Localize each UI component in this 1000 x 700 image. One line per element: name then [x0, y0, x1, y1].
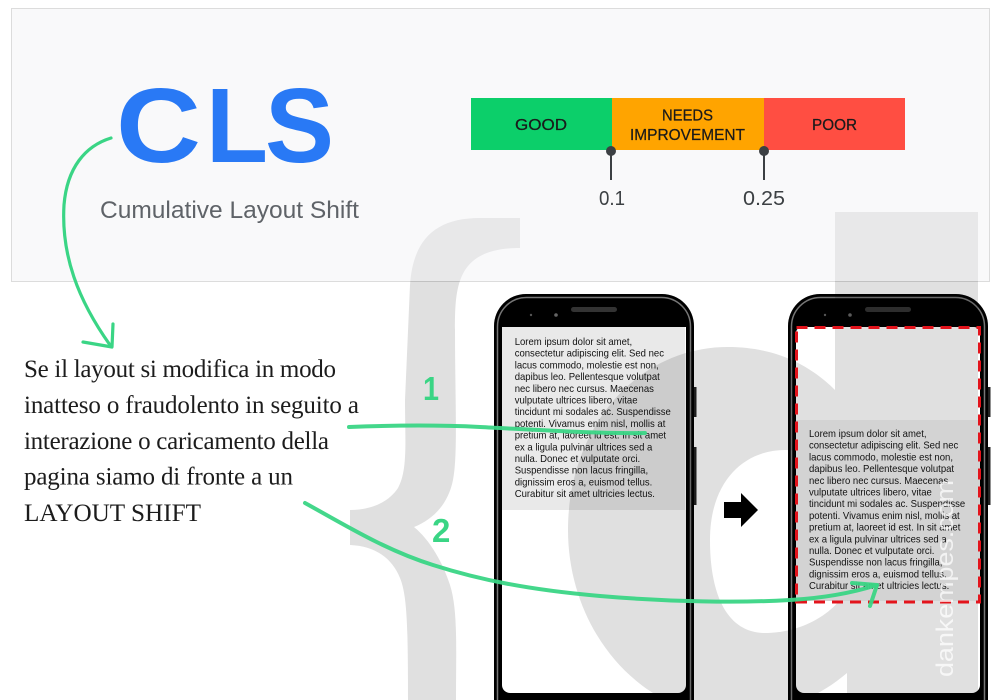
- phone 1 text: nulla. Donec et vulputate orci.: [515, 454, 640, 465]
- phone 2 text: nec libero nec cursus. Maecenas: [809, 476, 948, 487]
- watermark: brace and d logo: [350, 212, 978, 700]
- phone 2 text: nulla. Donec et vulputate orci.: [809, 546, 934, 557]
- label: needs improvement: IMPROVEMENT: [630, 127, 745, 144]
- marker 0.25: 0.25: [743, 188, 785, 210]
- phone 2 text: dignissim eros a, euismod tellus.: [809, 569, 947, 580]
- title: CLS: L: [206, 67, 268, 185]
- threshold bar: [471, 98, 905, 210]
- phone 1: before layout shift: [494, 294, 696, 700]
- phone 2 shifted content panel: [796, 420, 980, 601]
- phone 1 text: consectetur adipiscing elit. Sed nec: [515, 348, 664, 360]
- subtitle: Cumulative Layout Shift: [100, 197, 359, 224]
- phone 2 text: potenti. Vivamus enim nisl, mollis at: [809, 511, 960, 522]
- phone 1 text: lacus commodo, molestie est non,: [515, 360, 659, 371]
- header panel wash: [12, 9, 989, 281]
- title: CLS: [116, 67, 334, 185]
- phone 1 text: nec libero nec cursus. Maecenas: [515, 384, 654, 395]
- label: needs improvement: NEEDS: [662, 108, 713, 124]
- phone 2 text: Lorem ipsum dolor sit amet,: [809, 429, 927, 440]
- poor segment: [764, 98, 905, 150]
- body text: interazione o caricamento della: [24, 428, 329, 455]
- title: CLS: S: [265, 67, 334, 185]
- phone 1 text: Curabitur sit amet ultricies lectus.: [515, 489, 655, 500]
- phone 2 text: dapibus leo. Pellentesque volutpat: [809, 464, 954, 475]
- number 1: 1: [423, 370, 439, 407]
- phone 1 text: tincidunt mi sodales ac. Suspendisse: [515, 407, 671, 418]
- arrow between phones: [724, 493, 758, 527]
- phone 2 text: ex a ligula pulvinar ultrices sed a: [809, 534, 947, 545]
- body text: [24, 356, 359, 527]
- phone 2 text: vulputate ultrices libero, vitae: [809, 487, 932, 499]
- number 2: 2: [432, 512, 450, 549]
- phone 1 text: pretium at, laoreet id est. In sit amet: [515, 430, 666, 442]
- label: poor: POOR: [812, 117, 857, 134]
- phone 1 text: potenti. Vivamus enim nisl, mollis at: [515, 419, 666, 430]
- phone 2 text: Suspendisse non lacus fringilla,: [809, 557, 942, 569]
- panel: header background: [12, 8, 990, 282]
- label: good: GOOD: [515, 117, 567, 134]
- phone 1 text: dapibus leo. Pellentesque volutpat: [515, 372, 660, 383]
- phone 1 text: Suspendisse non lacus fringilla,: [515, 465, 648, 477]
- body text: inatteso o fraudolento in seguito a: [24, 392, 359, 419]
- marker 0.1: [599, 146, 625, 210]
- phone 2: after layout shift: [788, 294, 990, 700]
- arrow 1: [349, 426, 645, 433]
- phone 1 text: ex a ligula pulvinar ultrices sed a: [515, 442, 653, 453]
- marker 0.25: [743, 146, 785, 210]
- body text: pagina siamo di fronte a un: [24, 464, 294, 490]
- body text: LAYOUT SHIFT: [24, 500, 201, 527]
- needs improvement segment: [612, 98, 764, 150]
- arrow 2: [305, 503, 877, 606]
- good segment: [471, 98, 612, 150]
- watermark text: dankempes.com: [932, 480, 959, 677]
- label: needs improvement: [630, 108, 745, 144]
- dashed shift outline: [796, 328, 980, 602]
- marker 0.1: 0.1: [599, 188, 625, 210]
- phone 2 text: Curabitur sit amet ultricies lectus.: [809, 581, 949, 592]
- title: CLS: C: [116, 67, 201, 185]
- body text: Se il layout si modifica in modo: [24, 356, 336, 383]
- phone 1 text: dignissim eros a, euismod tellus.: [515, 477, 652, 488]
- phone 2 text: tincidunt mi sodales ac. Suspendisse: [809, 499, 966, 510]
- phone 2 text: consectetur adipiscing elit. Sed nec: [809, 440, 958, 452]
- phone 1 text: Lorem ipsum dolor sit amet,: [515, 337, 632, 348]
- phone 1 text: vulputate ultrices libero, vitae: [515, 395, 638, 407]
- arrow: CLS to text: [64, 138, 113, 347]
- phone 2 text: lacus commodo, molestie est non,: [809, 452, 953, 463]
- phone 2 text: pretium at, laoreet id est. In sit amet: [809, 522, 961, 534]
